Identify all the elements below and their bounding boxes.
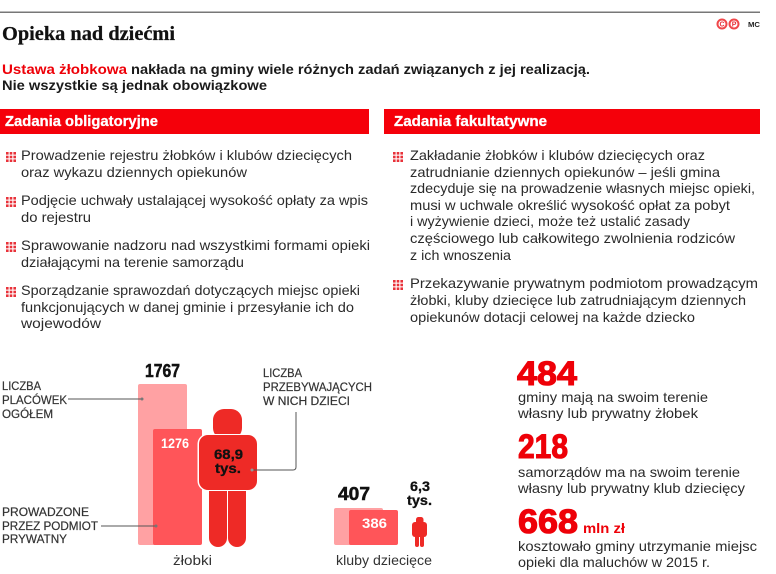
stat: 668 million zloty: kosztowało gminy utrzymanie miejsc — [518, 538, 757, 554]
icons: copyright and author — [718, 20, 760, 29]
list item 4 — [6, 282, 360, 331]
callout: private operators: PRZEZ PODMIOT — [2, 521, 98, 533]
stat: 218: własny lub prywatny klub dziecięcy — [517, 480, 745, 496]
callout: private operators: PRYWATNY — [2, 534, 67, 546]
list item 4: wojewodów — [20, 315, 102, 331]
value: 6,3 thousand: 6,3 — [410, 478, 430, 494]
stat: 484: 484 — [517, 355, 577, 393]
value: 68,9 thousand: 68,9 — [214, 446, 243, 462]
heading: obligatory tasks — [0, 109, 369, 134]
panel: obligatory tasks — [0, 109, 370, 331]
value: 6,3 thousand: tys. — [407, 492, 432, 508]
axis label: clubs: kluby dziecięce — [336, 552, 432, 568]
list item 4: Sporządzanie sprawozdań dotyczących miejsc opieki — [21, 282, 360, 298]
stat: 484: własny lub prywatny żłobek — [517, 405, 699, 421]
intro text: nakłada na gminy wiele różnych zadań związanych z jej realizacją. — [131, 61, 590, 77]
chart: nurseries — [2, 361, 372, 568]
intro text — [2, 61, 590, 93]
list item 1: Zakładanie żłobków i klubów dziecięcych oraz — [410, 147, 705, 163]
stat: 218: samorządów ma na swoim terenie — [518, 464, 740, 480]
stat: 668 million zloty: opieki dla maluchów w 2015 r. — [518, 554, 710, 570]
callout: children count: PRZEBYWAJĄCYCH — [263, 382, 372, 394]
value: 68,9 thousand: tys. — [215, 460, 241, 476]
list item 2: żłobki, kluby dziecięce lub zatrudniającym dziennych — [410, 292, 746, 308]
value: 68,9 thousand — [214, 446, 243, 476]
callout: children count: W NICH DZIECI — [263, 396, 350, 408]
stat: 218 — [517, 428, 745, 496]
stat: 668 million zloty: 668 — [518, 503, 578, 541]
value: 1276: 1276 — [161, 435, 189, 451]
list item 4: funkcjonujących w danej gminie i przesyłanie ich do — [21, 299, 354, 315]
list item 1: i wyżywienie dzieci, może też ustalić zasady — [410, 213, 690, 229]
list item 1: z ich wnoszenia — [410, 247, 511, 263]
list item 1: oraz wykazu dziennych opiekunów — [21, 164, 248, 180]
icon: child figure, nurseries — [198, 409, 260, 547]
stat: 668 million zloty: mln zł — [583, 520, 625, 536]
axis label: nurseries: żłobki — [173, 552, 212, 568]
callout: total facilities: OGÓŁEM — [2, 408, 53, 421]
value: 1767: 1767 — [145, 361, 180, 381]
list item 2 — [393, 275, 758, 325]
stat: 218: 218 — [518, 428, 568, 466]
stat: 484: gminy mają na swoim terenie — [518, 389, 708, 405]
list item 2 — [6, 192, 368, 225]
callout: total facilities: LICZBA — [2, 381, 41, 393]
chart: children's clubs — [334, 478, 432, 568]
list item 3: Sprawowanie nadzoru nad wszystkimi formami opieki — [21, 237, 370, 253]
list item 2: do rejestru — [21, 209, 91, 225]
callout: private operators: PROWADZONE — [2, 507, 89, 519]
callout: total facilities: PLACÓWEK — [2, 394, 67, 407]
callout: total facilities — [2, 381, 144, 421]
icons: copyright and author: P — [732, 22, 737, 28]
list item 1: częściowego lub całkowitego zwolnienia rodziców — [410, 230, 736, 246]
list item 2: Przekazywanie prywatnym podmiotom prowadzącym — [410, 275, 758, 291]
list item 1: zatrudnianie dziennych opiekunów – jeśli gmina — [410, 164, 720, 180]
value: 386: 386 — [362, 515, 387, 531]
value: 6,3 thousand — [407, 478, 432, 508]
bar: private facilities — [153, 429, 202, 545]
list item 3: działającymi na terenie samorządu — [21, 254, 244, 270]
callout: private operators — [2, 507, 158, 546]
icons: copyright and author: MC — [748, 22, 760, 29]
list item 1: Prowadzenie rejestru żłobków i klubów dziecięcych — [21, 147, 352, 163]
panel: optional tasks — [384, 109, 760, 325]
list item 1 — [6, 147, 352, 180]
stat: 484 — [517, 355, 708, 421]
heading: obligatory tasks: Zadania obligatoryjne — [5, 113, 158, 130]
value: 407: 407 — [338, 484, 370, 504]
list item 3 — [6, 237, 370, 270]
heading: optional tasks — [384, 109, 760, 134]
icon: child figure, clubs — [412, 517, 427, 547]
title: Opieka nad dziećmi — [2, 23, 175, 45]
heading: optional tasks: Zadania fakultatywne — [394, 113, 547, 130]
stat: 668 million zloty — [518, 503, 757, 570]
intro text: Nie wszystkie są jednak obowiązkowe — [2, 77, 267, 93]
list item 2: Podjęcie uchwały ustalającej wysokość opłaty za wpis — [21, 192, 368, 208]
icons: copyright and author: C — [720, 22, 725, 28]
list item 2: opiekunów dotacji celowej na każde dziecko — [410, 309, 695, 325]
list item 1: zdecyduje się na prowadzenie własnych miejsc opieki, — [410, 180, 755, 196]
callout: children count — [250, 368, 372, 472]
bar: all facilities — [138, 384, 187, 545]
list item 1 — [393, 147, 755, 263]
bar: all clubs — [334, 508, 383, 545]
callout: children count: LICZBA — [263, 368, 302, 380]
bar: private clubs — [349, 510, 398, 545]
intro text: Ustawa żłobkowa — [2, 61, 127, 77]
list item 1: musi w uchwale określić wysokość opłat za pobyt — [410, 197, 730, 213]
